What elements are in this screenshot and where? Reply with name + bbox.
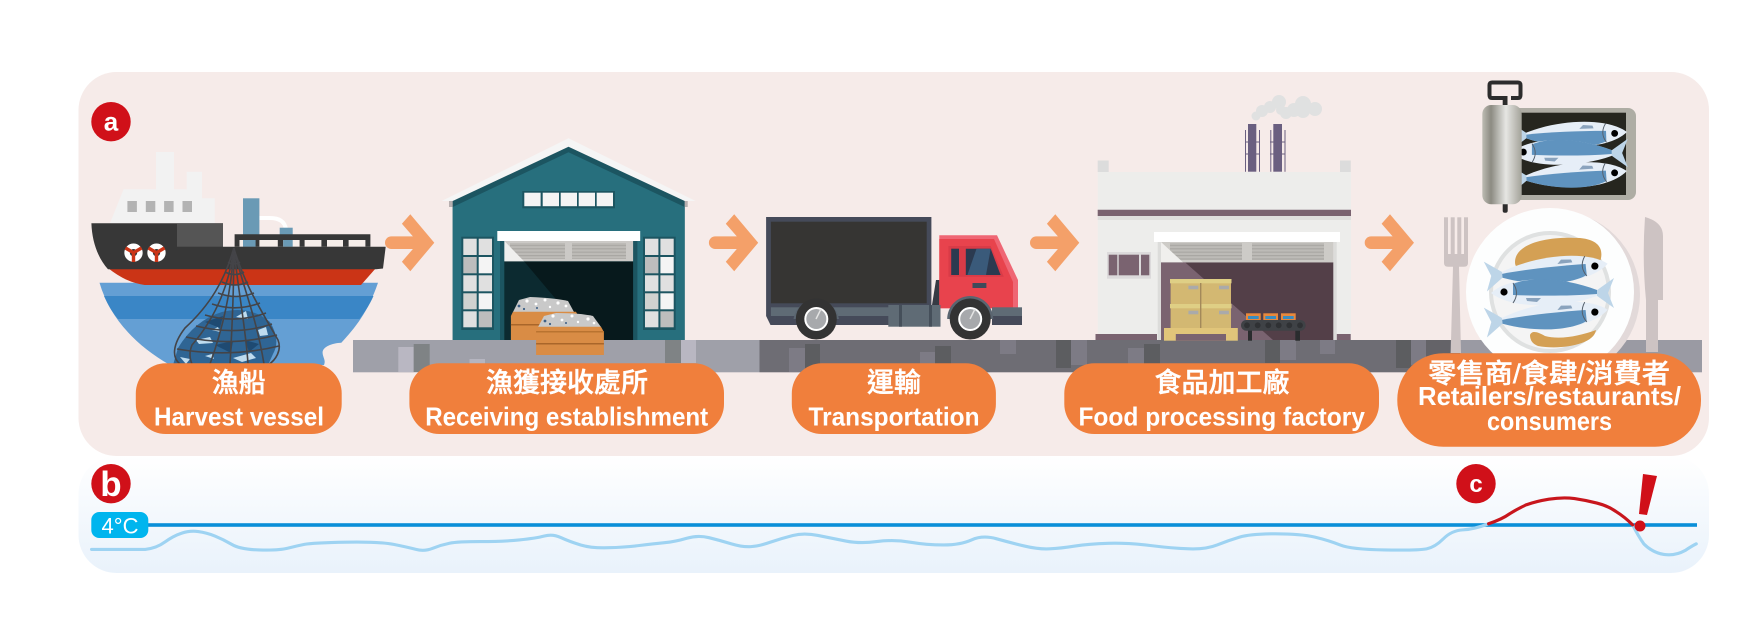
key handle <box>1490 82 1520 98</box>
hull <box>91 223 386 269</box>
door opening <box>504 261 633 340</box>
factory wall <box>1098 172 1351 340</box>
icon: receiving establishment <box>442 138 696 355</box>
icon: fork <box>1444 217 1468 353</box>
fish catch <box>173 310 276 365</box>
label: receiving establishment <box>409 363 724 434</box>
label: retailers restaurants consumers <box>1397 353 1701 447</box>
label: retailers restaurants consumers: consumers <box>1487 406 1612 436</box>
label: retailers restaurants consumers: 零售商/食肆/消費者 <box>1428 359 1670 389</box>
door interior <box>1161 262 1333 340</box>
label: harvest vessel <box>136 363 342 434</box>
tray <box>1505 108 1636 200</box>
fish bottom <box>1484 295 1609 338</box>
blue funnels <box>243 198 293 247</box>
smoke <box>1252 95 1322 120</box>
arrow 3 <box>1030 214 1079 271</box>
label: transportation <box>792 363 996 434</box>
panel: supply chain <box>78 72 1709 456</box>
label: receiving establishment: 漁獲接收處所 <box>486 368 648 398</box>
door frame <box>500 241 637 340</box>
fuel tank <box>888 305 940 327</box>
chimneys <box>1245 124 1285 172</box>
fishing net <box>175 248 279 365</box>
stacked boxes <box>1164 279 1238 341</box>
rolled lid <box>1482 105 1522 204</box>
cab window frame <box>948 246 1004 277</box>
bumper <box>992 307 1022 316</box>
fish top <box>1484 249 1609 292</box>
label: retailers restaurants consumers: Retailers/restaurants/ <box>1418 381 1681 411</box>
rear wheel <box>794 298 839 340</box>
fish middle <box>1491 278 1614 308</box>
arrow 4 <box>1365 214 1414 271</box>
badge b: b <box>100 465 122 504</box>
building body <box>453 147 685 340</box>
shutter <box>504 241 633 261</box>
deck rail <box>235 234 370 247</box>
cab link <box>932 280 940 305</box>
white roof <box>442 138 696 201</box>
red keel <box>108 268 376 285</box>
warning mark <box>1634 474 1657 532</box>
cabin windows <box>127 201 192 212</box>
label: 4°C: 4°C <box>102 514 139 538</box>
can fish middle <box>1511 139 1628 167</box>
bread bottom <box>1530 330 1596 347</box>
top window <box>522 191 615 208</box>
can fish top <box>1510 118 1627 150</box>
plate shadow <box>1472 211 1640 379</box>
badge a: a <box>104 106 119 136</box>
temperature curve <box>92 524 1696 555</box>
icon: harvest vessel <box>91 152 386 365</box>
bread top <box>1515 238 1601 268</box>
factory window <box>1107 252 1151 279</box>
left window <box>461 237 494 330</box>
label: 4°C <box>91 512 148 538</box>
label: harvest vessel: Harvest vessel <box>154 402 324 432</box>
factory shutter <box>1161 242 1333 262</box>
label: transportation: 運輸 <box>867 368 921 398</box>
arrow 2 <box>709 214 758 271</box>
can fish bottom <box>1509 157 1628 193</box>
ground strip <box>353 340 1702 372</box>
label: harvest vessel: 漁船 <box>212 368 266 398</box>
superstructure <box>110 152 215 223</box>
corner blocks <box>1098 160 1351 172</box>
threshold line <box>140 523 1697 527</box>
icon: truck <box>766 217 1022 340</box>
sea bowl <box>100 283 378 365</box>
arrow 1 <box>385 214 434 271</box>
conveyor <box>1241 313 1306 341</box>
label: food processing factory <box>1064 363 1379 434</box>
label: receiving establishment: Receiving establishment <box>425 402 709 432</box>
panel: temperature <box>78 456 1709 573</box>
badge c <box>1456 464 1496 503</box>
key stems <box>1503 96 1508 213</box>
icon: opened can <box>1482 82 1636 213</box>
icon: plate of fish <box>1466 208 1640 379</box>
door pillars <box>1158 242 1337 340</box>
label: food processing factory: Food processing factory <box>1078 402 1365 432</box>
awning <box>497 231 640 241</box>
badge b <box>91 464 131 504</box>
badge a <box>91 102 131 141</box>
crate back <box>511 297 578 340</box>
badge c: c <box>1469 471 1483 498</box>
white pipe <box>259 218 286 229</box>
wall bases <box>1096 334 1351 340</box>
factory awning <box>1154 232 1340 242</box>
cargo box <box>766 217 931 325</box>
front wheel <box>947 296 993 340</box>
label: transportation: Transportation <box>808 402 980 432</box>
label: food processing factory: 食品加工廠 <box>1154 368 1290 398</box>
icon: food processing factory <box>1096 95 1351 341</box>
cab <box>939 235 1018 308</box>
life rings <box>127 246 163 259</box>
right window <box>643 237 676 330</box>
icon: knife <box>1644 217 1663 352</box>
plate <box>1466 208 1634 376</box>
crate front <box>536 313 604 355</box>
sea band <box>104 296 374 319</box>
temperature excursion <box>1489 498 1633 525</box>
